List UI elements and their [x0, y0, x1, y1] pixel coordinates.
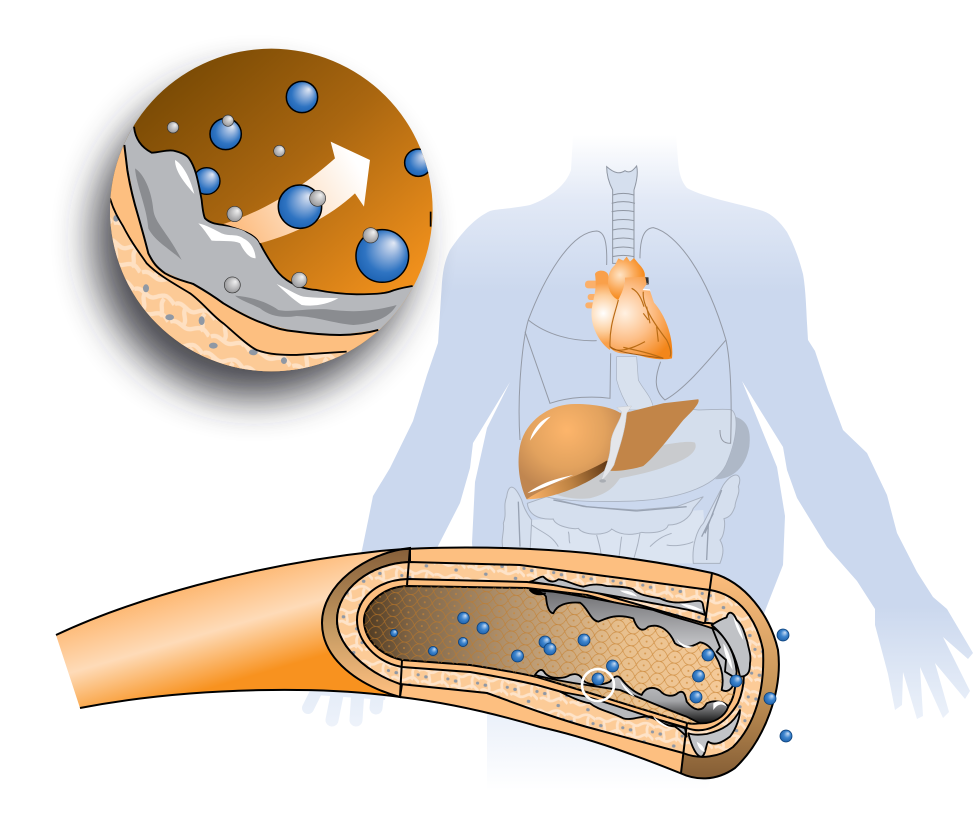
shadow of magnified circle: [94, 78, 414, 398]
left rim: [322, 548, 410, 697]
artery outer shaft: [56, 548, 779, 778]
aorta: [608, 257, 645, 300]
oesophagus: [617, 357, 653, 410]
liver: [519, 399, 699, 499]
ventricle: [609, 277, 672, 359]
artery wall band: [110, 145, 382, 372]
section lines: [400, 548, 712, 773]
magnified plaque circle: [100, 43, 440, 380]
upper folded edge: [530, 590, 545, 594]
lumen background: [103, 43, 440, 380]
tissue ring: [337, 562, 763, 757]
migrating arrow: [223, 142, 370, 243]
blue LDL particles: [390, 612, 792, 742]
upper wall plaque: [530, 577, 705, 615]
lower right plaque: [688, 710, 740, 757]
coronary vessels: [610, 288, 671, 358]
right wall plaque: [712, 613, 750, 677]
lower wall plaque: [560, 692, 687, 737]
liver underside: [527, 461, 609, 499]
inner stomach shadow: [553, 442, 696, 499]
ligament: [602, 406, 632, 480]
lumen: [364, 586, 736, 724]
plaque dark streaks: [135, 168, 397, 325]
inner band: [357, 579, 744, 730]
tissue layer: [110, 199, 350, 372]
plaque highlights: [175, 160, 338, 306]
upper lumen plaque: [530, 590, 737, 691]
artery outline: [56, 548, 779, 778]
liver right lobe: [603, 399, 699, 471]
lungs: [519, 228, 731, 443]
plaque deposits: [530, 577, 750, 757]
right inner folded line: [712, 627, 733, 677]
tissue line: [110, 198, 347, 355]
plaque highlights: [620, 591, 743, 752]
trachea: [607, 166, 637, 263]
intestines: [502, 475, 740, 563]
plaque surface outline: [134, 127, 413, 294]
heart: [585, 257, 672, 359]
human body silhouette: [308, 135, 973, 810]
vessels behind right side: [640, 277, 651, 297]
stomach: [545, 407, 736, 502]
grey particles: [167, 115, 378, 293]
blue particles: [210, 81, 432, 282]
lower lumen plaque: [535, 670, 728, 723]
right atrium: [591, 271, 618, 350]
liver highlights: [527, 417, 573, 493]
artery cross-section: [56, 547, 792, 778]
right rim: [681, 573, 779, 778]
grey particle behind plaque: [250, 227, 264, 241]
spleen: [715, 417, 750, 479]
vessels: [585, 281, 602, 308]
liver left lobe: [519, 404, 621, 499]
rim mark: [430, 212, 432, 227]
plaque: [124, 126, 414, 334]
magnifier ring: [582, 669, 614, 701]
tissue cell dots: [113, 215, 287, 364]
wall line: [124, 145, 378, 335]
cut band: [322, 547, 712, 773]
lumen mesh: [364, 586, 736, 724]
stomach and spleen: [545, 357, 750, 502]
blue particle behind plaque: [193, 168, 220, 194]
